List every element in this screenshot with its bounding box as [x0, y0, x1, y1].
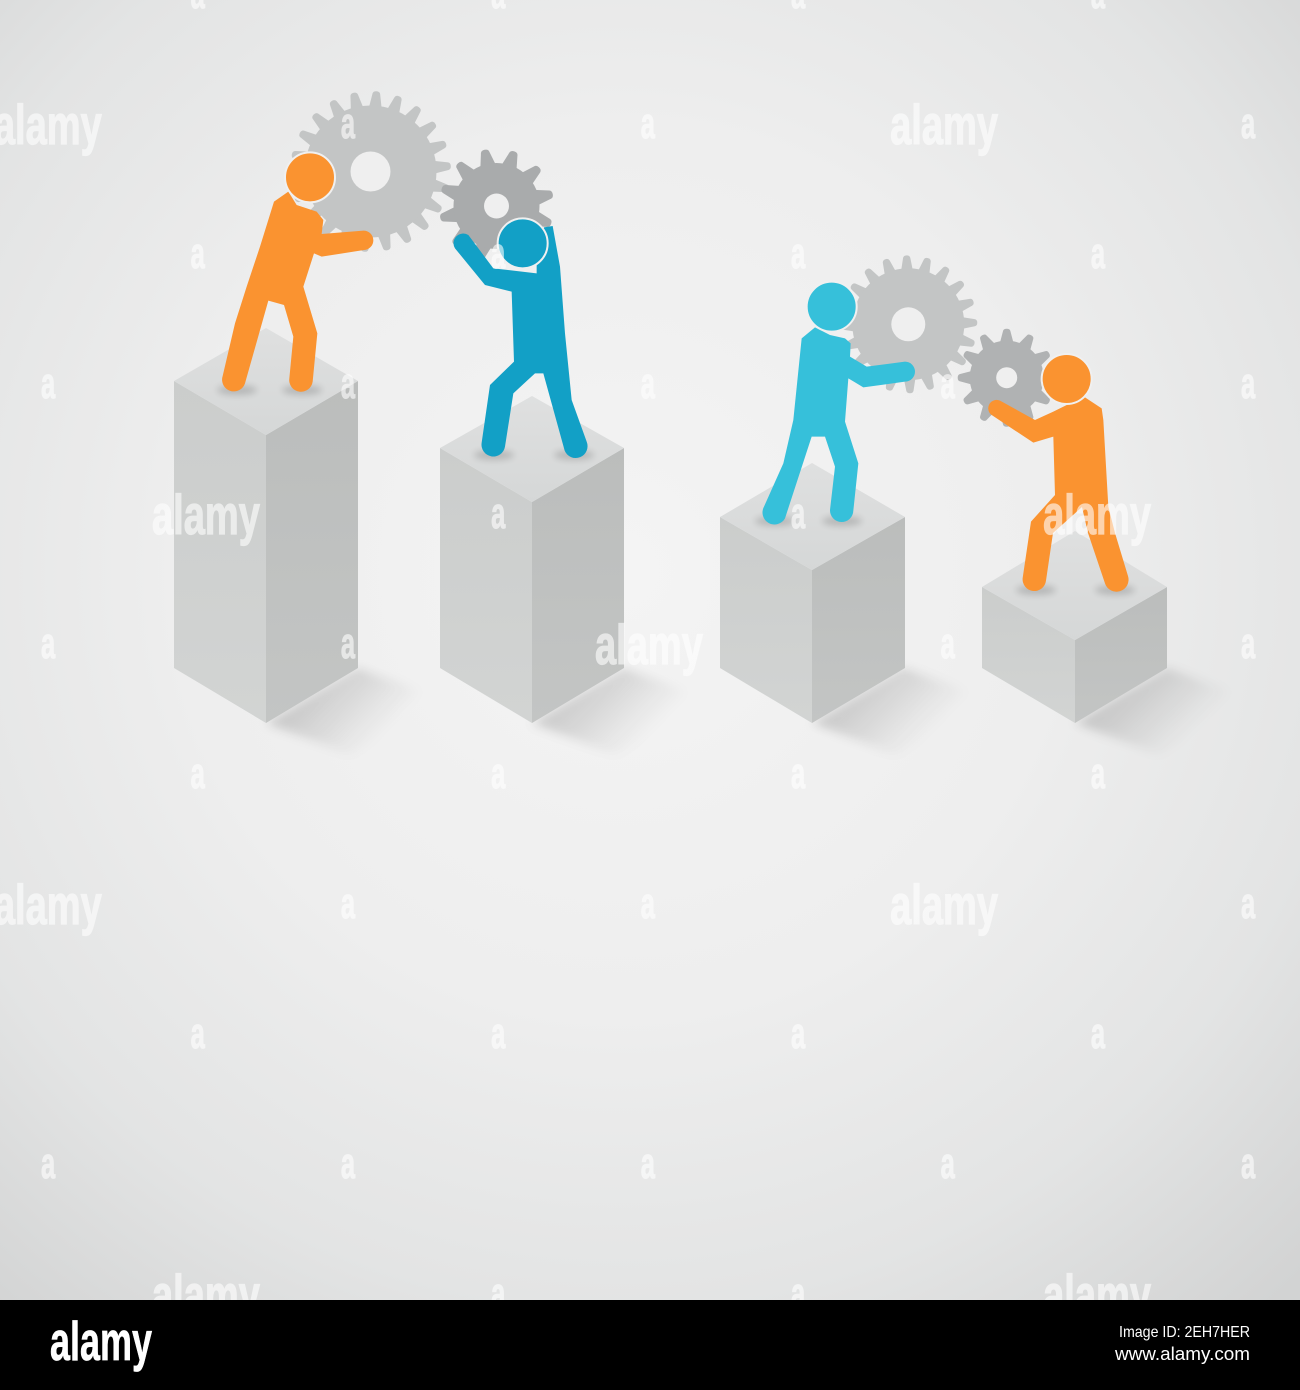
watermark: small a marks: a — [191, 1008, 206, 1058]
figure: dark blue person, pillar 2 — [454, 218, 588, 458]
pillar 1 left face — [174, 381, 266, 723]
orange person body — [222, 192, 373, 392]
watermark: small a marks: a — [41, 618, 56, 668]
watermark: small a marks: a — [941, 1138, 956, 1188]
watermark: small a marks: a — [1241, 98, 1256, 148]
watermark: small a marks: a — [791, 1268, 806, 1318]
watermark: small a marks: a — [491, 748, 506, 798]
watermark: small a marks: a — [341, 618, 356, 668]
watermark: small a marks: a — [491, 488, 506, 538]
watermark: small a marks: a — [791, 1008, 806, 1058]
pillar 4 — [982, 531, 1261, 755]
pillar 3 shadow — [812, 668, 998, 755]
website: www.alamy.com — [1114, 1343, 1250, 1364]
gear: small, top left — [439, 148, 554, 264]
pillar 4 top face — [982, 531, 1167, 640]
watermark: small a marks: a — [641, 1138, 656, 1188]
watermark: small a marks: a — [1091, 1008, 1106, 1058]
watermark: small a marks: a — [1241, 1138, 1256, 1188]
watermark: small a marks: a — [641, 878, 656, 928]
figure: orange person, pillar 1 — [222, 152, 373, 392]
watermark: small a marks: a — [191, 228, 206, 278]
footer bar — [0, 1300, 1300, 1390]
watermark: small a marks: a — [1091, 228, 1106, 278]
pillar 4 shadow — [1075, 668, 1261, 755]
pillar 1 — [174, 328, 452, 755]
watermark: large alamy marks: alamy — [1043, 1265, 1151, 1327]
pillar 2 left face — [440, 448, 532, 723]
figure: cyan person, pillar 3 — [762, 282, 915, 525]
watermark: small a marks: a — [491, 228, 506, 278]
figure: orange person, pillar 4 — [988, 354, 1129, 592]
watermark: small a marks: a — [941, 358, 956, 408]
pillar 4 right face — [1075, 587, 1167, 723]
orange person head — [285, 152, 335, 202]
pillar 2 — [440, 396, 718, 755]
watermark: small a marks: a — [641, 98, 656, 148]
watermark: small a marks: a — [491, 1268, 506, 1318]
pillar 1 top face — [174, 328, 358, 435]
watermark: small a marks: a — [41, 358, 56, 408]
watermark: small a marks: a — [791, 488, 806, 538]
pillar 1 right face — [266, 381, 358, 723]
watermark: small a marks: a — [791, 748, 806, 798]
foot shadows — [217, 385, 1135, 595]
pillar 2 top face — [440, 396, 624, 502]
watermark: small a marks: a — [1241, 618, 1256, 668]
watermark: small a marks: a — [1091, 748, 1106, 798]
watermark: small a marks: a — [341, 878, 356, 928]
watermark: large alamy marks: alamy — [1043, 485, 1151, 547]
gear: large, top left — [290, 91, 451, 252]
orange person 2 head — [1042, 354, 1092, 404]
pillar 1 shadow — [266, 668, 452, 755]
watermark: large alamy marks — [0, 95, 1151, 1327]
image id: Image ID: 2EH7HER — [1119, 1324, 1250, 1341]
dark blue person body — [454, 226, 588, 458]
watermark: small a marks: a — [341, 98, 356, 148]
gear: large, right pair — [839, 255, 977, 393]
pillar 3 top face — [720, 463, 905, 570]
pillar 2 right face — [532, 448, 624, 723]
pillar 4 left face — [982, 587, 1075, 723]
gear: small, right pair — [958, 329, 1056, 427]
orange person 2 body — [988, 397, 1129, 592]
watermark: large alamy marks: alamy — [890, 875, 998, 937]
watermark: small a marks: a — [341, 358, 356, 408]
watermark: small a marks: a — [791, 228, 806, 278]
footer logo: alamy — [50, 1310, 152, 1372]
watermark: small a marks: a — [1241, 878, 1256, 928]
watermark: small a marks: a — [941, 618, 956, 668]
watermark: small a marks: a — [191, 748, 206, 798]
watermark: large alamy marks: alamy — [595, 615, 703, 677]
cyan person body — [762, 327, 915, 525]
watermark: large alamy marks: alamy — [152, 1265, 260, 1327]
watermark: small a marks: a — [641, 358, 656, 408]
watermark: large alamy marks: alamy — [890, 95, 998, 157]
pillar 3 right face — [812, 517, 905, 723]
pillar 2 shadow — [532, 668, 718, 755]
watermark: small a marks: a — [491, 1008, 506, 1058]
watermark: small a marks: a — [341, 1138, 356, 1188]
watermark: small a marks: a — [1241, 358, 1256, 408]
pillar 3 — [720, 463, 998, 755]
watermark: small a marks: a — [41, 1138, 56, 1188]
cyan person head — [807, 282, 857, 332]
pillar 3 left face — [720, 517, 812, 723]
dark blue person head — [498, 218, 548, 268]
watermark: large alamy marks: alamy — [152, 485, 260, 547]
